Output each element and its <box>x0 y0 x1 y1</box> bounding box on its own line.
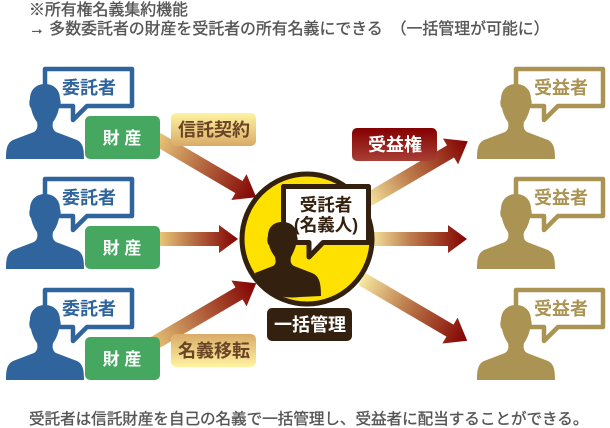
settlor row 3: 委託者 <box>62 299 116 319</box>
tag: trust agreement: 信託契約 <box>178 120 250 140</box>
label: batch management <box>267 308 352 341</box>
trustee circle <box>242 174 372 304</box>
beneficiary 2: 受益者 <box>534 187 588 208</box>
heading note <box>29 1 550 38</box>
tag: name transfer <box>171 334 256 367</box>
settlor row 1: 委託者 <box>62 78 116 98</box>
asset box row 2: 財 産 <box>103 239 141 258</box>
label: batch management: 一括管理 <box>274 314 346 335</box>
settlor row 2 <box>6 179 132 269</box>
settlor row 1 <box>6 69 132 159</box>
arrow: row 2 to trustee <box>160 225 238 253</box>
tag: name transfer: 名義移転 <box>178 341 250 361</box>
beneficiary 1 <box>477 69 603 159</box>
tag: beneficial right <box>352 128 437 161</box>
beneficiary 3: 受益者 <box>534 298 588 319</box>
tag: beneficial right: 受益権 <box>368 134 422 155</box>
settlor row 2: 委託者 <box>62 188 116 208</box>
asset box row 3 <box>85 337 160 380</box>
arrow: row 3 to trustee <box>143 270 264 358</box>
trustee circle: 受託者 <box>300 195 352 215</box>
beneficiary 3 <box>477 290 603 380</box>
footer summary text: 受託者は信託財産を自己の名義で一括管理し、受益者に配当することができる。 <box>29 410 588 428</box>
arrow: row 1 to trustee <box>149 126 264 210</box>
heading note: ※所有権名義集約機能 <box>29 1 188 19</box>
asset box row 2 <box>85 226 160 269</box>
arrow: trustee to beneficiary 1 <box>358 128 475 214</box>
arrow: trustee to beneficiary 2 <box>370 225 467 253</box>
settlor row 3 <box>6 290 132 380</box>
tag: trust agreement <box>171 113 256 146</box>
asset box row 1 <box>85 116 160 159</box>
heading note: → 多数委託者の財産を受託者の所有名義にできる （一括管理が可能に） <box>29 20 550 38</box>
beneficiary 1: 受益者 <box>534 77 588 98</box>
asset box row 1: 財 産 <box>103 129 141 148</box>
beneficiary 2 <box>477 179 603 269</box>
trustee circle: (名義人) <box>294 215 358 235</box>
asset box row 3: 財 産 <box>103 350 141 369</box>
arrow: trustee to beneficiary 3 <box>354 266 475 354</box>
